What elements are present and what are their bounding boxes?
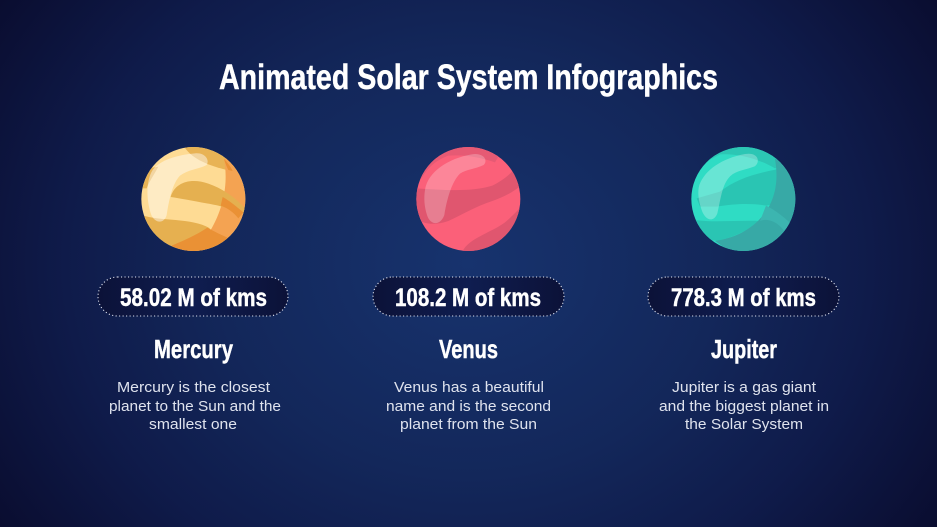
panel: Venus: [373, 145, 564, 433]
description: [659, 379, 829, 433]
description: [109, 379, 281, 433]
description: and the biggest planet in: [659, 398, 829, 415]
planet name: Venus: [439, 334, 498, 364]
description: Mercury is the closest: [117, 379, 271, 396]
description: Jupiter is a gas giant: [672, 379, 817, 396]
icon: Venus planet: [415, 145, 522, 252]
icon: Jupiter planet: [690, 145, 797, 252]
description: smallest one: [149, 416, 237, 433]
distance pill: [373, 277, 564, 316]
panel: Mercury: [98, 145, 288, 433]
distance pill: 58.02 M of kms: [120, 284, 267, 312]
description: Venus has a beautiful: [394, 379, 544, 396]
title: Animated Solar System Infographics: [219, 58, 718, 97]
description: planet from the Sun: [400, 416, 537, 433]
icon: Mercury planet: [140, 145, 247, 255]
distance pill: 778.3 M of kms: [671, 284, 816, 312]
planet name: Jupiter: [711, 334, 777, 364]
distance pill: 108.2 M of kms: [395, 284, 541, 312]
description: [386, 379, 551, 433]
description: the Solar System: [685, 416, 803, 433]
distance pill: [98, 277, 288, 316]
description: name and is the second: [386, 398, 551, 415]
distance pill: [648, 277, 839, 316]
panel: Jupiter: [648, 145, 839, 433]
planet name: Mercury: [154, 334, 233, 364]
description: planet to the Sun and the: [109, 398, 281, 415]
